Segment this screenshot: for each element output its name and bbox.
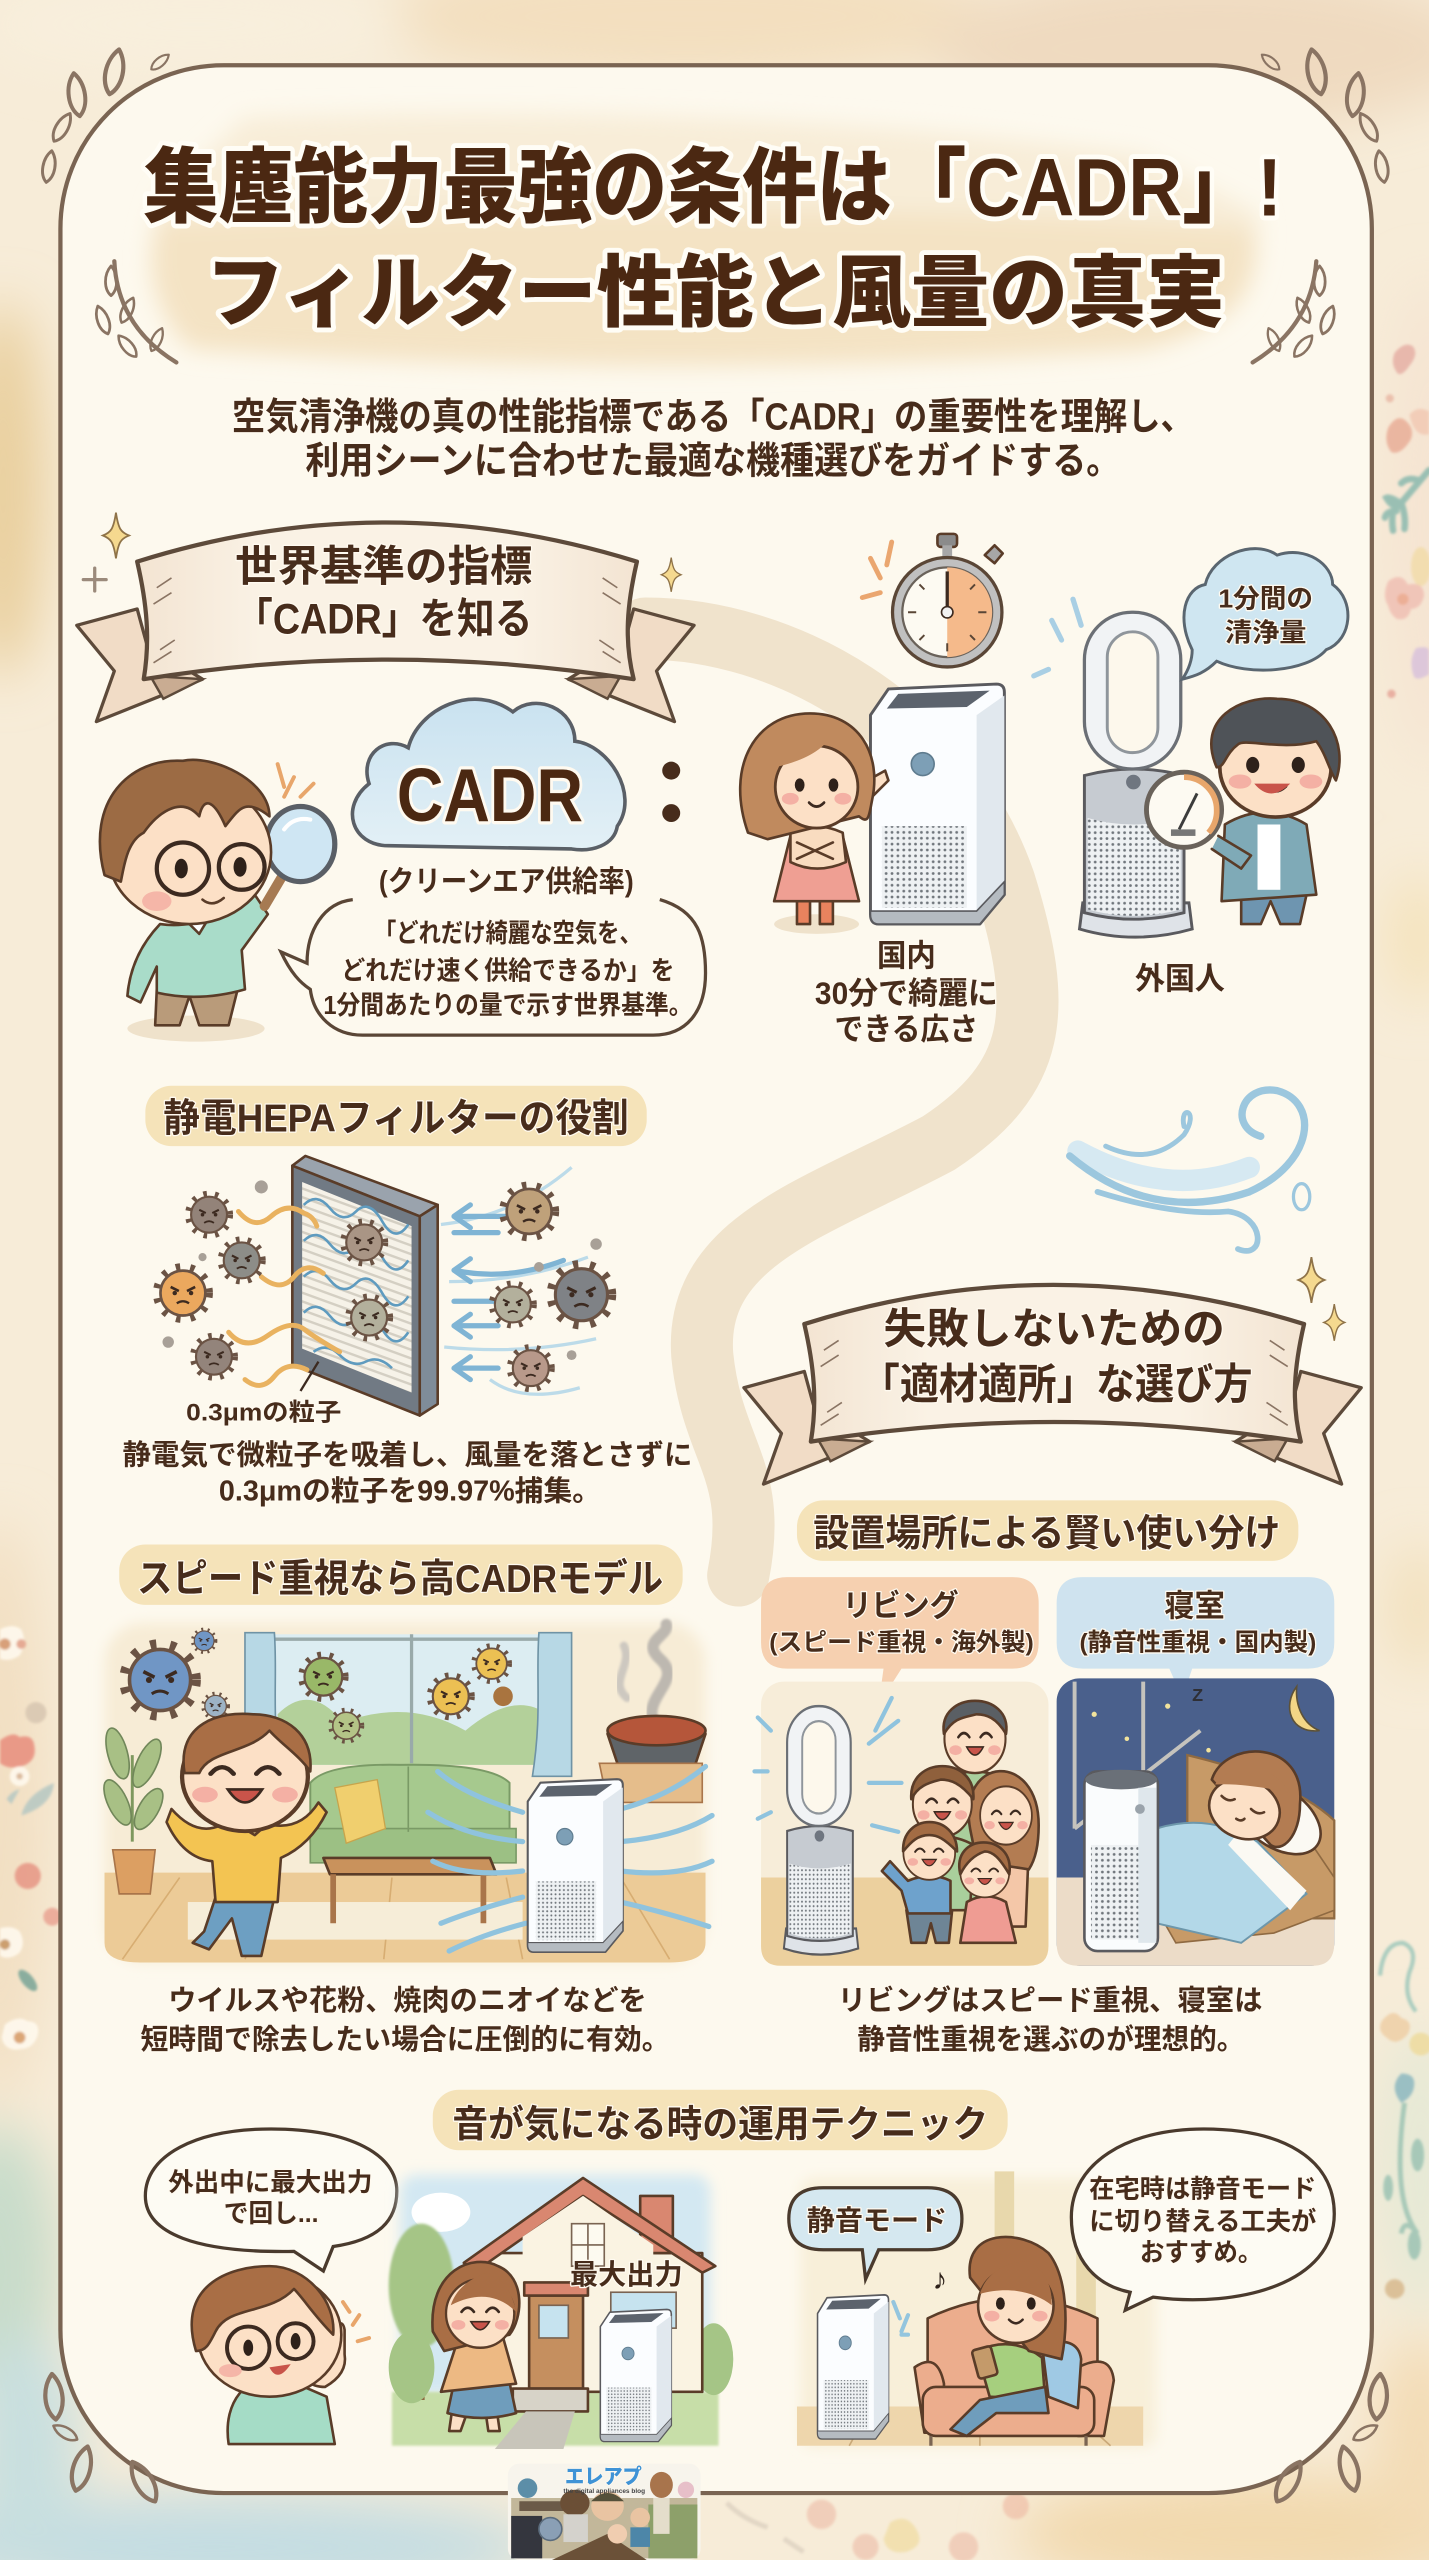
title: フィルター性能と風量の真実 — [206, 249, 1225, 337]
room scene: ♪ — [933, 2263, 947, 2296]
bubble: max output while out: 外出中に最大出力 — [168, 2169, 372, 2197]
label: foreign: 外国人 — [1135, 961, 1225, 996]
colon mark — [662, 762, 680, 822]
bubble: bedroom: 寝室 — [1164, 1588, 1225, 1623]
house scene — [389, 2175, 733, 2449]
sparkles — [83, 513, 681, 592]
decorative flowers lower right edge — [1380, 1943, 1429, 2299]
CADR japanese name: (クリーンエア供給率) — [379, 865, 634, 898]
sparkles right — [1298, 1257, 1345, 1341]
HEPA description — [122, 1439, 692, 1507]
label: domestic — [815, 939, 998, 1047]
HEPA description: 静電気で微粒子を吸着し、風量を落とさずに — [122, 1439, 692, 1471]
connecting path wash — [645, 629, 1028, 1576]
boy with magnifier — [100, 760, 335, 1042]
bubble: max output while out: で回し... — [224, 2200, 318, 2228]
wind ticks — [1034, 599, 1081, 676]
bubble: max output while out — [145, 2129, 397, 2271]
pill: HEPA heading — [145, 1086, 647, 1146]
pill: HEPA heading: 静電HEPAフィルターの役割 — [163, 1097, 629, 1140]
sofa — [310, 1765, 516, 1863]
label: domestic: 国内 — [877, 939, 936, 974]
CADR speech bubble: 「どれだけ綺麗な空気を、 — [374, 918, 642, 948]
placement description: 静音性重視を選ぶのが理想的。 — [857, 2023, 1244, 2056]
ribbon: world standard: 世界基準の指標 — [235, 543, 532, 590]
pill: speed heading — [119, 1544, 683, 1605]
speech cloud: per minute: 1分間の — [1218, 583, 1313, 613]
virus characters — [124, 1629, 513, 1742]
sky and ground — [392, 2175, 719, 2446]
glasses boy pointing — [192, 2266, 369, 2444]
label: domestic: 30分で綺麗に — [815, 976, 998, 1011]
ribbon: right choice — [744, 1285, 1361, 1484]
speed description — [140, 1985, 670, 2056]
coffee table — [323, 1858, 496, 1923]
pill: speed heading: スピード重視なら高CADRモデル — [137, 1557, 663, 1601]
pill: placement heading: 設置場所による賢い使い分け — [813, 1512, 1280, 1554]
bottom floral wash — [727, 2493, 1029, 2560]
brush wash behind title — [149, 114, 1259, 366]
bubble: silent mode: 静音モード — [807, 2205, 947, 2236]
bubble: bedroom: (静音性重視・国内製) — [1080, 1629, 1316, 1657]
bubble: bedroom — [1057, 1577, 1334, 1698]
ribbon: right choice: 失敗しないための — [884, 1306, 1225, 1353]
living room scene — [98, 1623, 712, 1962]
bubble: at home tip: 在宅時は静音モード — [1089, 2176, 1316, 2204]
window with outdoor pollutants — [245, 1633, 572, 1776]
subtitle — [232, 395, 1194, 481]
placement description: リビングはスピード重視、寝室は — [838, 1984, 1262, 2017]
family living scene — [755, 1682, 1048, 1966]
subtitle: 利用シーンに合わせた最適な機種選びをガイドする。 — [305, 439, 1120, 481]
house — [464, 2178, 715, 2449]
decorative title sprigs — [93, 261, 1338, 362]
girl pointing — [740, 713, 888, 934]
ribbon: world standard: 「CADR」を知る — [235, 595, 532, 642]
CADR speech bubble: どれだけ速く供給できるか」を — [341, 956, 674, 986]
room scene — [797, 2171, 1156, 2447]
domestic purifier — [870, 684, 1004, 924]
placement description — [838, 1984, 1262, 2056]
speed description: ウイルスや花粉、焼肉のニオイなどを — [168, 1985, 647, 2017]
title — [144, 143, 1282, 337]
sleeping girl — [1201, 1752, 1300, 1849]
CADR speech bubble — [281, 900, 706, 1035]
HEPA filter diagram — [156, 1156, 612, 1416]
bubble: at home tip: に切り替える工夫が — [1089, 2207, 1316, 2236]
woman reading — [950, 2237, 1065, 2436]
trees — [389, 2224, 733, 2403]
potted plant — [98, 1726, 169, 1894]
CADR cloud — [352, 699, 625, 850]
label: domestic: できる広さ — [835, 1012, 978, 1047]
decorative flowers right edge — [1385, 345, 1429, 698]
bubble: living: リビング — [843, 1588, 959, 1623]
foreign purifier dyson — [1080, 612, 1192, 937]
bubble: living: (スピード重視・海外製) — [769, 1629, 1034, 1657]
max output label: 最大出力 — [570, 2259, 683, 2290]
bedroom scene — [1057, 1678, 1334, 1966]
CADR speech bubble: 1分間あたりの量で示す世界基準。 — [323, 990, 692, 1020]
cylinder purifier — [1084, 1770, 1158, 1951]
logo card: エレアプ — [565, 2465, 642, 2488]
particle label: 0.3μmの粒子 — [186, 1398, 341, 1426]
ribbon: world standard — [77, 522, 694, 722]
happy boy — [167, 1714, 327, 1956]
bedroom scene: Z — [1192, 1685, 1203, 1705]
pill: placement heading — [797, 1500, 1298, 1561]
subtitle: 空気清浄機の真の性能指標である「CADR」の重要性を理解し、 — [232, 395, 1194, 437]
pill: noise technique heading: 音が気になる時の運用テクニック — [452, 2103, 988, 2145]
bubble: silent mode — [789, 2188, 962, 2279]
ribbon: right choice: 「適材適所」な選び方 — [861, 1361, 1253, 1408]
armchair — [915, 2298, 1114, 2446]
bubble: living — [761, 1577, 1039, 1704]
family members — [882, 1701, 1039, 1943]
HEPA description: 0.3μmの粒子を99.97%捕集。 — [219, 1475, 601, 1507]
logo card: the digital appliances blog — [563, 2488, 645, 2495]
decorative flowers left edge — [0, 1626, 61, 2050]
smoke and yakiniku pot — [599, 1624, 706, 1802]
pill: noise technique heading — [433, 2090, 1008, 2150]
wind swirl icon — [1070, 1090, 1310, 1251]
man with gauge — [1146, 698, 1340, 924]
speed description: 短時間で除去したい場合に圧倒的に有効。 — [140, 2024, 670, 2056]
CADR cloud: CADR — [397, 753, 583, 837]
logo card — [508, 2464, 701, 2560]
girl walking — [432, 2262, 519, 2431]
floor — [105, 1873, 706, 1962]
speech cloud: per minute: 清浄量 — [1225, 618, 1307, 648]
bubble: at home tip: おすすめ。 — [1140, 2239, 1262, 2267]
purifier with wind — [428, 1767, 712, 1952]
bubble: at home tip — [1071, 2129, 1334, 2310]
speech cloud: per minute — [1182, 549, 1348, 679]
bed — [1143, 1755, 1334, 1943]
stopwatch — [862, 534, 1003, 667]
title: 集塵能力最強の条件は「CADR」! — [144, 143, 1282, 234]
